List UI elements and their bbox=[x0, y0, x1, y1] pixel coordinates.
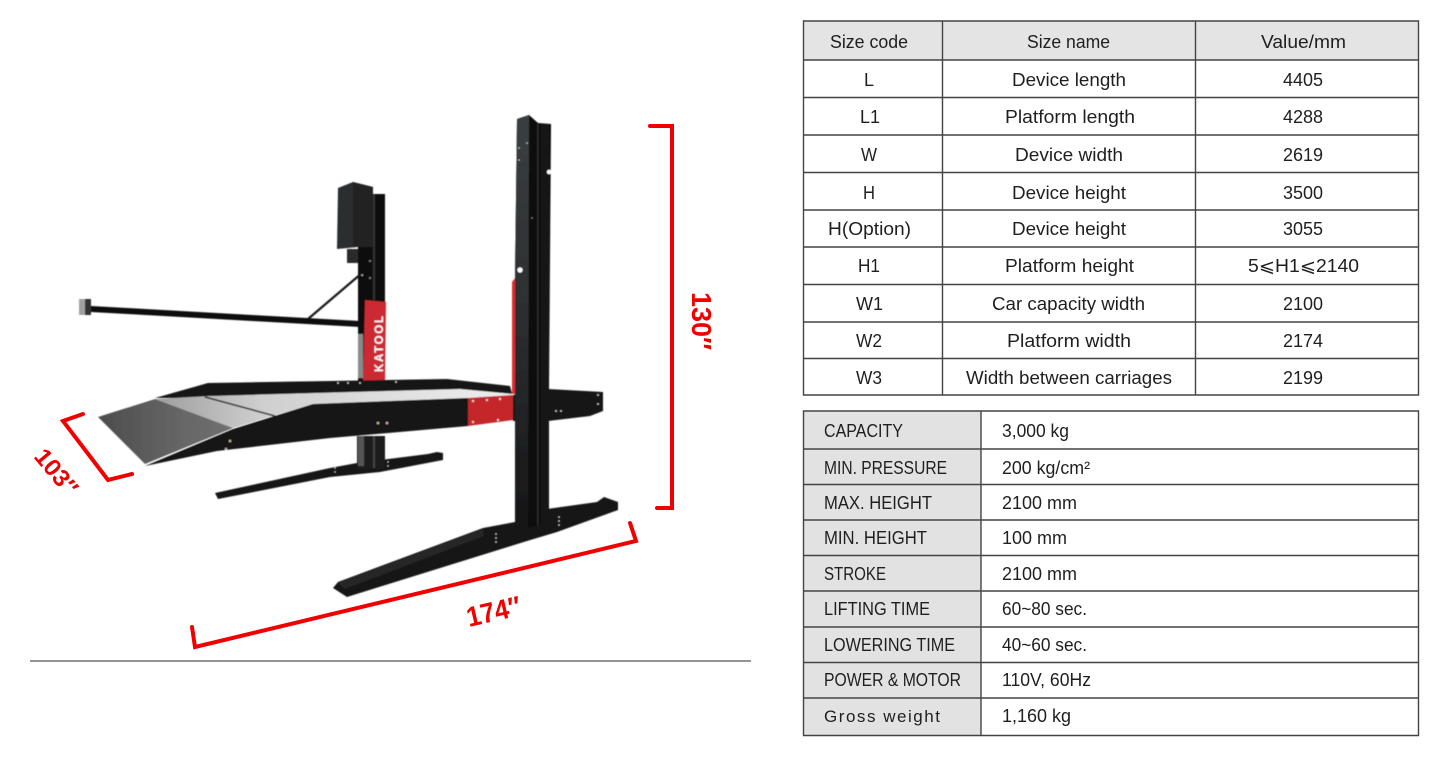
row W bbox=[861, 145, 1323, 165]
table: capacity specifications bbox=[804, 411, 1418, 736]
row H1: 5⩽H1⩽2140 bbox=[1248, 256, 1359, 276]
spec gross weight: Gross weight bbox=[824, 707, 940, 726]
dimension: height bracket bbox=[650, 126, 672, 508]
row L1 bbox=[860, 107, 1323, 127]
spec min pressure bbox=[824, 458, 1090, 478]
spec lifting time bbox=[824, 599, 1087, 619]
row H: Device height bbox=[1012, 183, 1126, 203]
access ramp bbox=[98, 399, 233, 464]
row L1: Platform length bbox=[1005, 107, 1135, 127]
row W1: 2100 bbox=[1283, 294, 1323, 314]
row H bbox=[863, 183, 1323, 203]
spec min pressure: 200 kg/cm² bbox=[1002, 458, 1090, 478]
spec lowering time: LOWERING TIME bbox=[824, 635, 955, 655]
spec stroke: STROKE bbox=[824, 564, 886, 584]
dimension: length label: 174″ bbox=[463, 590, 524, 633]
dimension: width bracket bbox=[63, 414, 132, 480]
spec power and motor: POWER & MOTOR bbox=[824, 670, 961, 690]
spec lowering time: 40~60 sec. bbox=[1002, 635, 1087, 655]
row L1: L1 bbox=[860, 107, 880, 127]
table header: Size name bbox=[1027, 32, 1110, 52]
platform near rail bbox=[145, 398, 468, 466]
row W2 bbox=[856, 331, 1323, 351]
row H: 3500 bbox=[1283, 183, 1323, 203]
lift illustration bbox=[79, 115, 618, 597]
spec min height bbox=[824, 528, 1067, 548]
row W3: Width between carriages bbox=[966, 368, 1172, 388]
row W2: 2174 bbox=[1283, 331, 1323, 351]
spec max height: 2100 mm bbox=[1002, 493, 1077, 513]
row W1 bbox=[856, 294, 1323, 314]
spec min height: 100 mm bbox=[1002, 528, 1067, 548]
platform deck bbox=[155, 389, 513, 428]
spec min height: MIN. HEIGHT bbox=[824, 528, 927, 548]
row L: Device length bbox=[1012, 70, 1126, 90]
spec lowering time bbox=[824, 635, 1087, 655]
table header: Value/mm bbox=[1261, 32, 1346, 52]
spec power and motor bbox=[824, 670, 1091, 690]
row W2: Platform width bbox=[1007, 331, 1131, 351]
row W3 bbox=[856, 368, 1323, 388]
row H option: 3055 bbox=[1283, 219, 1323, 239]
row H: H bbox=[863, 183, 875, 203]
row W1: W1 bbox=[856, 294, 883, 314]
table header bbox=[830, 32, 1346, 52]
table header background bbox=[804, 21, 1419, 60]
row L: L bbox=[864, 70, 874, 90]
ground line bbox=[30, 660, 751, 662]
row H option: Device height bbox=[1012, 219, 1126, 239]
red rail plate bbox=[468, 395, 513, 426]
spec lifting time: 60~80 sec. bbox=[1002, 599, 1087, 619]
spec stroke: 2100 mm bbox=[1002, 564, 1077, 584]
row W2: W2 bbox=[856, 331, 882, 351]
row H1: Platform height bbox=[1005, 256, 1134, 276]
row L bbox=[864, 70, 1323, 90]
row H option bbox=[828, 219, 1323, 239]
row W: W bbox=[861, 145, 877, 165]
row L1: 4288 bbox=[1283, 107, 1323, 127]
support arm bbox=[79, 273, 362, 327]
platform far rail bbox=[155, 379, 513, 398]
label column background bbox=[804, 411, 981, 735]
spec gross weight: 1,160 kg bbox=[1002, 706, 1071, 726]
spec capacity: CAPACITY bbox=[824, 421, 903, 441]
spec min pressure: MIN. PRESSURE bbox=[824, 458, 947, 478]
rear post bbox=[357, 194, 385, 469]
spec lifting time: LIFTING TIME bbox=[824, 599, 930, 619]
deck centre strip bbox=[205, 397, 275, 416]
spec max height bbox=[824, 493, 1077, 513]
rail right end bbox=[513, 389, 603, 421]
row W: 2619 bbox=[1283, 145, 1323, 165]
row H1 bbox=[858, 256, 1359, 276]
spec stroke bbox=[824, 564, 1077, 584]
front post bbox=[512, 115, 551, 537]
table header: Size code bbox=[830, 32, 908, 52]
row W3: 2199 bbox=[1283, 368, 1323, 388]
spec gross weight bbox=[824, 706, 1071, 726]
front foot bbox=[333, 497, 618, 597]
dimension: length bracket bbox=[192, 523, 636, 647]
row H option: H(Option) bbox=[828, 219, 911, 239]
red KATOOL panel: KATOOL bbox=[374, 316, 386, 372]
row W: Device width bbox=[1015, 145, 1123, 165]
row L: 4405 bbox=[1283, 70, 1323, 90]
spec max height: MAX. HEIGHT bbox=[824, 493, 932, 513]
spec power and motor: 110V, 60Hz bbox=[1002, 670, 1091, 690]
red KATOOL panel bbox=[363, 300, 386, 381]
dimension: width label: 103″ bbox=[28, 444, 83, 502]
spec capacity: 3,000 kg bbox=[1002, 421, 1069, 441]
rear foot bbox=[215, 452, 443, 499]
control box bbox=[337, 182, 373, 263]
spec capacity bbox=[824, 421, 1069, 441]
dimension: height label: 130″ bbox=[686, 292, 717, 350]
row H1: H1 bbox=[858, 256, 880, 276]
row W1: Car capacity width bbox=[992, 294, 1145, 314]
table: size dimensions bbox=[804, 21, 1419, 395]
row W3: W3 bbox=[856, 368, 882, 388]
